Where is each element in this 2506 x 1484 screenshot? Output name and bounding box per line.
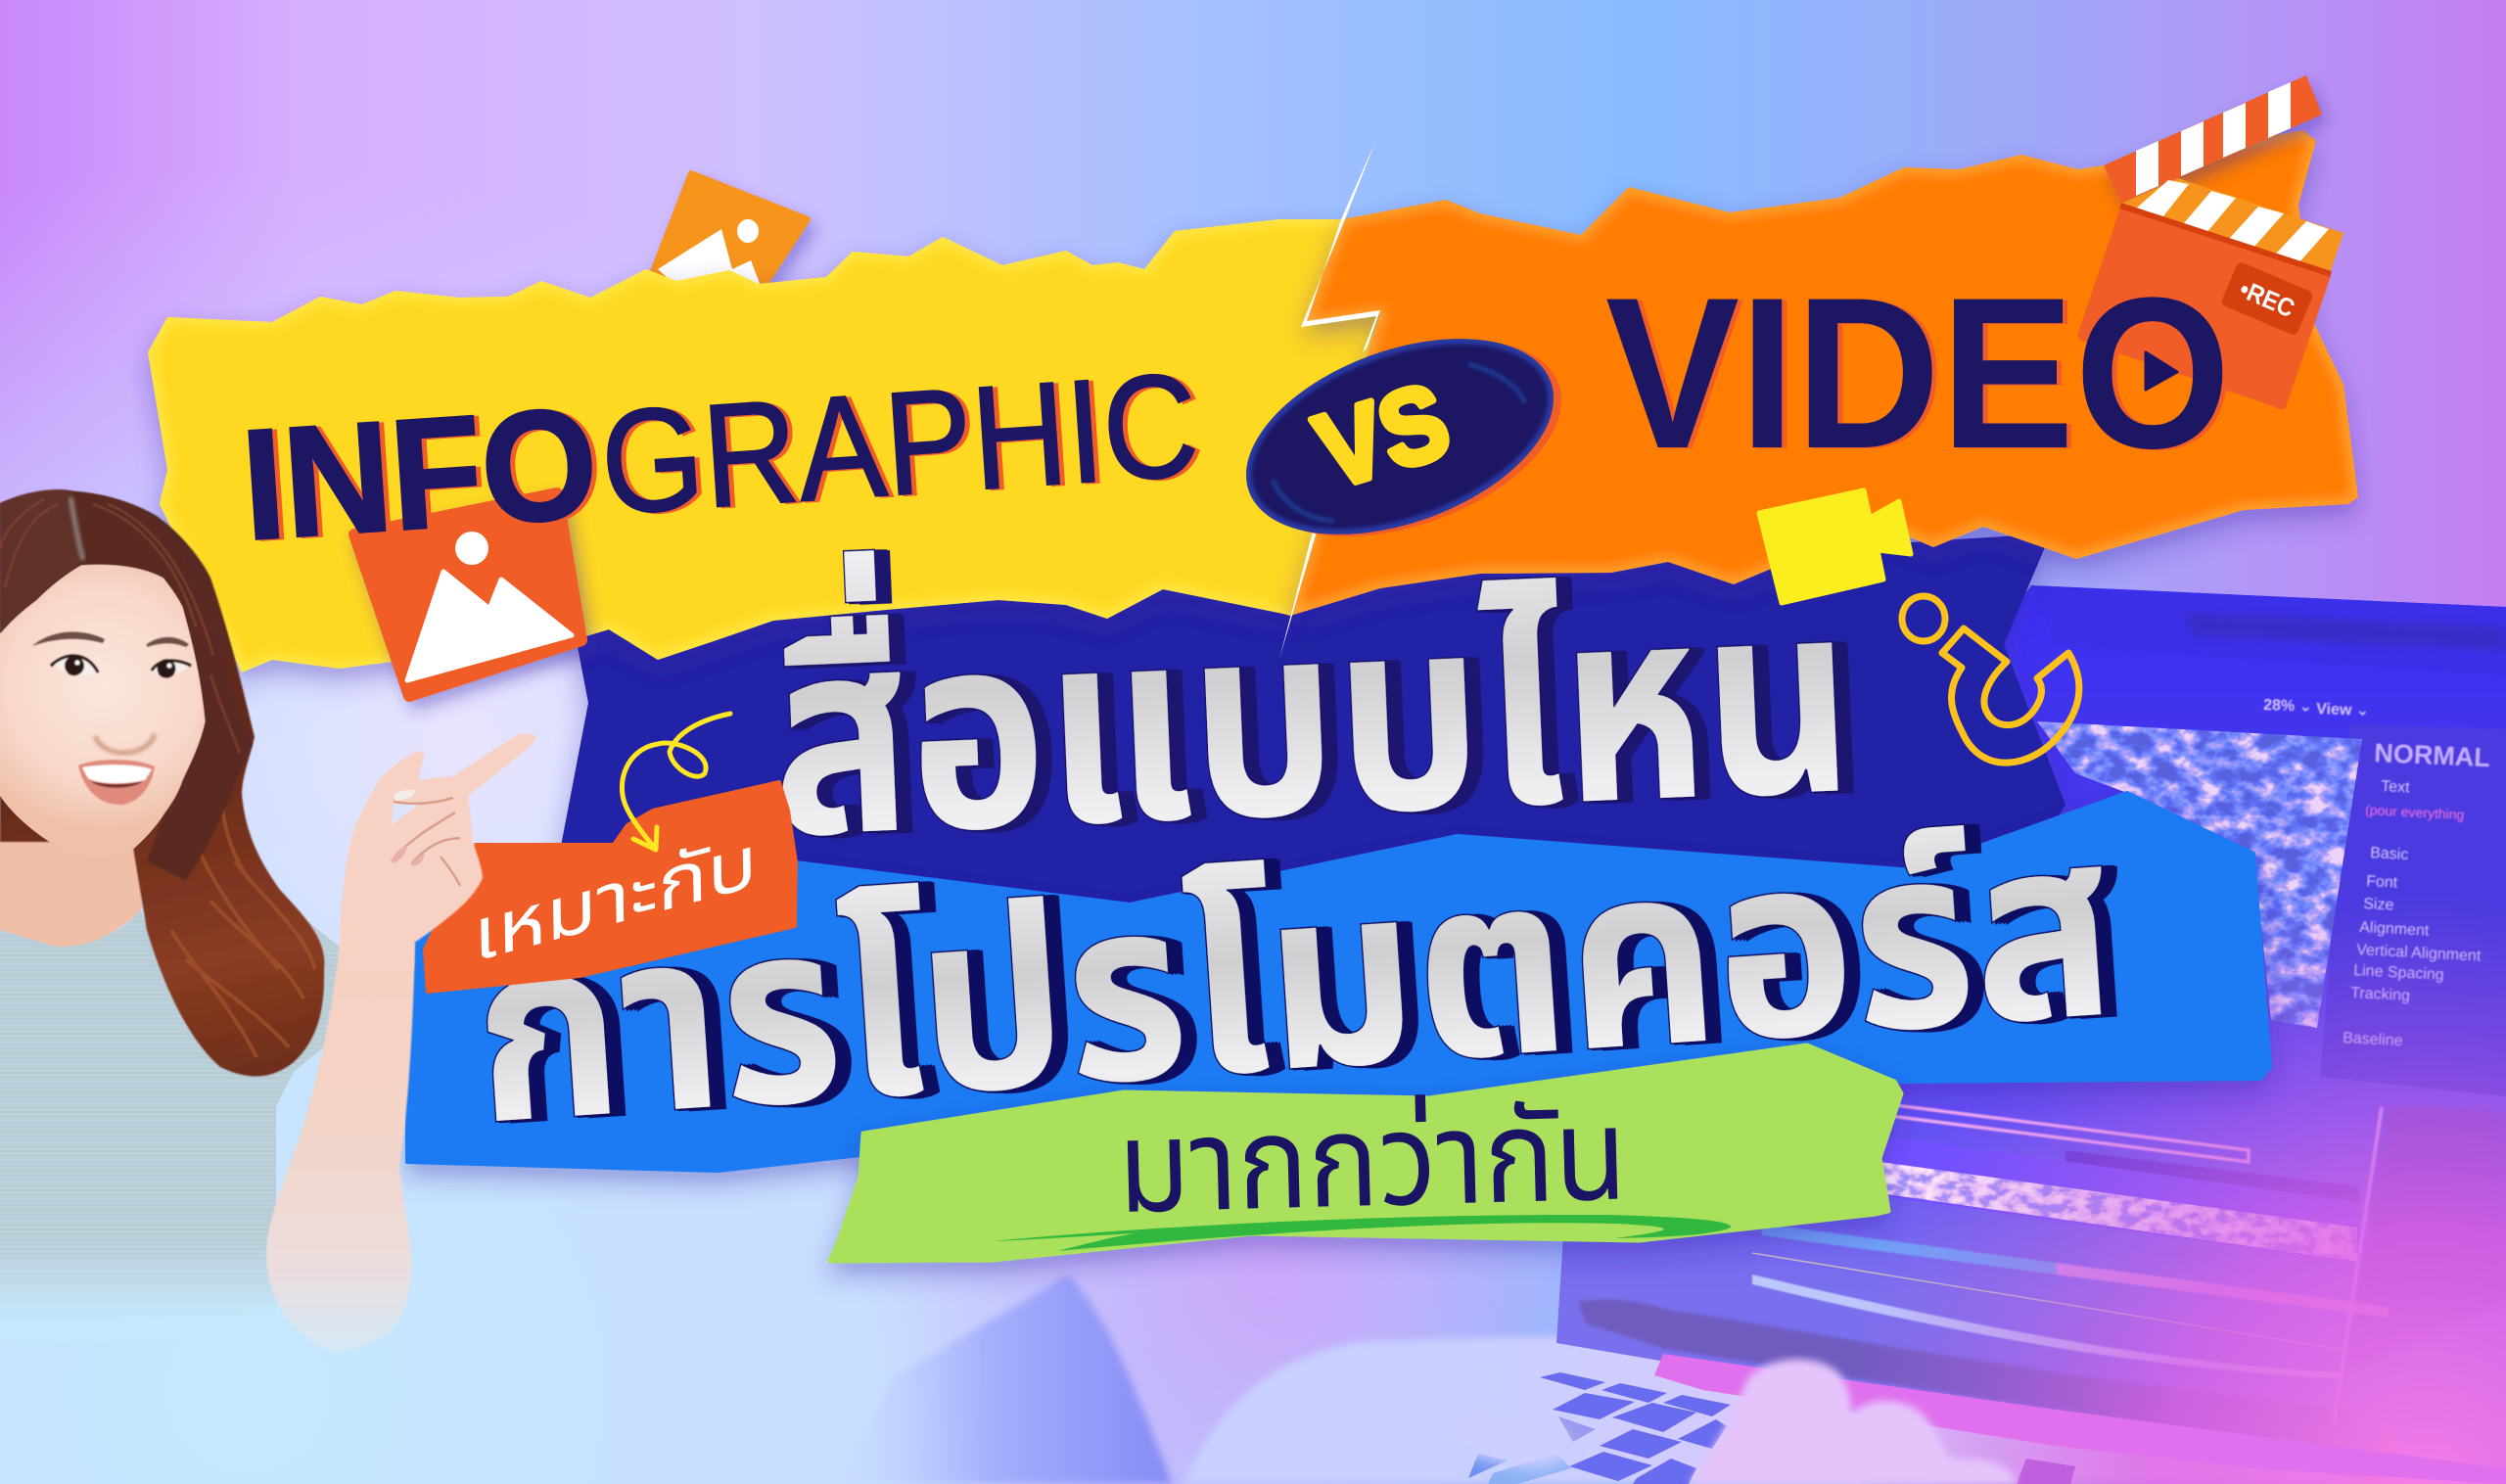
heading: INFOGRAPHIC: INFO (237, 374, 602, 573)
ribbon text: มากกว่ากัน (1116, 1082, 1629, 1239)
heading: VIDEO: VIDEO (1605, 253, 2231, 493)
editor property panel labels: Size (2363, 896, 2394, 914)
editor property panel labels: Font (2366, 873, 2398, 892)
heading: INFOGRAPHIC: GRAPHIC (596, 342, 1203, 545)
tag text: เหมาะกับ (473, 820, 758, 977)
panel: orange video torn paper (1290, 130, 2358, 616)
finger gap (392, 802, 423, 825)
photo: pink hinge strip and keyboard (1439, 1354, 2506, 1484)
face (0, 564, 206, 857)
nose (95, 734, 155, 753)
hair curls (171, 773, 315, 1057)
icon: gold outline question mark (1902, 596, 2079, 763)
neck (0, 822, 142, 947)
fingers (1439, 1360, 2017, 1484)
icon: small orange picture behind yellow panel (650, 173, 808, 294)
panel: yellow infographic torn paper (148, 219, 1380, 672)
panel: navy headline band (558, 533, 2065, 930)
editor property panel labels: Line Spacing (2353, 962, 2444, 984)
green brush swoosh (993, 1215, 1731, 1251)
VS badge (1220, 301, 1588, 575)
editor property panel labels: Baseline (2343, 1030, 2403, 1049)
REC badge: •REC (2235, 274, 2299, 323)
hair mass (0, 490, 324, 1077)
arm (266, 943, 415, 1351)
panel: blue headline band (407, 793, 2270, 1171)
arrow: yellow looping arrow (622, 714, 730, 850)
person: woman pointing (0, 489, 536, 1351)
editor property panel labels: Text (2381, 778, 2411, 797)
heading: INFOGRAPHIC (237, 342, 1203, 573)
mouth (78, 760, 155, 805)
editor property panel labels: (pour everything (2365, 802, 2465, 822)
tag: orange label (425, 782, 796, 992)
icon: clapperboard (2078, 75, 2344, 409)
photo: laptop with video editor (1556, 585, 2506, 1484)
headline: second Thai line: การโปรโมตคอร์ส (466, 785, 2121, 1176)
dark band at the bottom of the screen (1578, 1299, 2379, 1459)
curled fingernails (392, 846, 425, 866)
VS text: VS (1303, 360, 1462, 511)
eyebrows (32, 632, 189, 647)
editor property panel labels: View ⌄ (2316, 701, 2369, 719)
editor preview image (2037, 721, 2362, 1028)
hair front (0, 489, 253, 881)
editor property panel labels: Tracking (2350, 985, 2410, 1004)
icon: play triangle in O (2146, 352, 2177, 390)
headline: first Thai line: สื่อแบบไหน (764, 507, 1859, 893)
eyes (51, 656, 191, 677)
editor property panel labels: Vertical Alignment (2356, 942, 2482, 965)
index nail (394, 790, 415, 801)
icon: large orange picture (354, 493, 581, 696)
editor property panel labels: Basic (2370, 845, 2409, 863)
panel: green ribbon (830, 1045, 1901, 1261)
editor property panel labels: NORMAL (2374, 738, 2490, 772)
editor property panel labels: 28% ⌄ (2263, 697, 2312, 716)
editor property panel labels (2263, 697, 2490, 1049)
editor property panel labels: Alignment (2359, 919, 2430, 940)
shirt (0, 908, 340, 1321)
REC badge (2220, 260, 2314, 337)
photo: blurred person shadow at the bottom (842, 1275, 1173, 1484)
lightning divider line (1279, 142, 1380, 659)
timeline tracks (1890, 1105, 2249, 1162)
icon: yellow video camera (1759, 490, 1911, 603)
hand (340, 733, 536, 969)
curled fingers (392, 798, 460, 886)
body fade (0, 1243, 294, 1341)
photo: laptop deck below the screen (1184, 1336, 2506, 1484)
pink glow over the lower right of the screen (1860, 881, 2506, 1484)
